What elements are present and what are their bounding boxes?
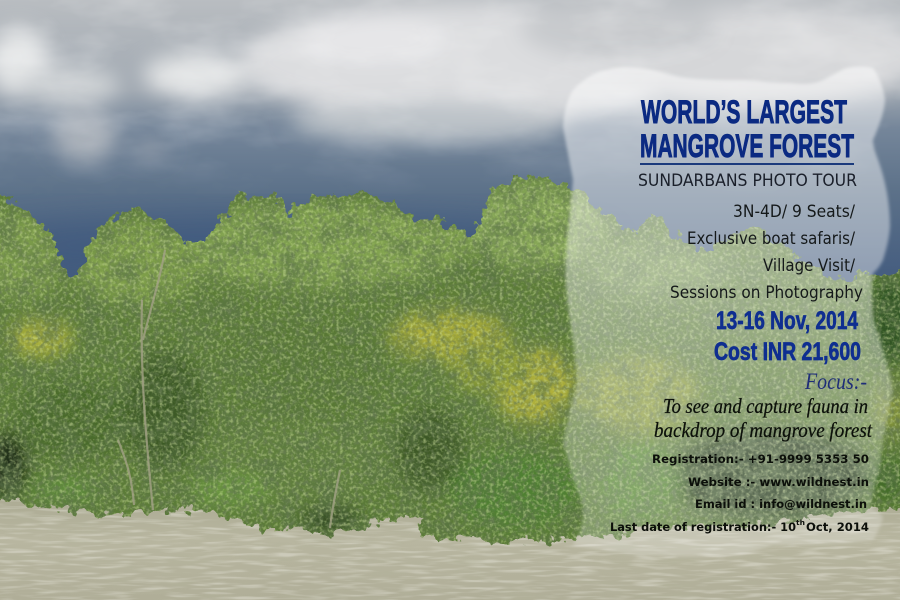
storm cloud band	[0, 213, 610, 277]
white clouds	[0, 0, 900, 163]
canopy tones	[0, 180, 900, 530]
registration details: th	[796, 519, 805, 527]
photo background: mangrove forest	[0, 160, 900, 550]
heading: world's largest mangrove forest	[640, 94, 854, 164]
focus heading: Focus:-	[804, 369, 867, 394]
tour details: Exclusive boat safaris/	[687, 229, 855, 249]
registration details: Website :- www.wildnest.in	[688, 475, 869, 489]
registration details	[610, 452, 869, 534]
photo background: water	[0, 490, 900, 600]
focus description	[654, 394, 873, 442]
tour details: 3N-4D/ 9 Seats/	[733, 202, 855, 222]
photo background: sky	[0, 0, 900, 282]
subtitle: SUNDARBANS PHOTO TOUR	[638, 171, 857, 191]
registration details: Registration:- +91-9999 5353 50	[652, 452, 869, 466]
registration details: Oct, 2014	[806, 520, 869, 534]
tour details	[670, 202, 863, 303]
cloud texture	[0, 0, 900, 174]
focus description: backdrop of mangrove forest	[654, 418, 873, 442]
tour details: Village Visit/	[763, 256, 855, 276]
focus description: To see and capture fauna in	[663, 394, 868, 418]
tree trunks	[118, 250, 340, 528]
dates and cost: Cost INR 21,600	[714, 338, 861, 366]
registration details: Last date of registration:- 10	[610, 520, 796, 534]
heading underline	[640, 163, 854, 165]
tour details: Sessions on Photography	[670, 283, 863, 303]
translucent text panel	[563, 66, 893, 556]
dates and cost: 13-16 Nov, 2014	[716, 307, 858, 335]
registration details: Email id : info@wildnest.in	[695, 497, 867, 511]
dates and cost	[714, 307, 861, 366]
